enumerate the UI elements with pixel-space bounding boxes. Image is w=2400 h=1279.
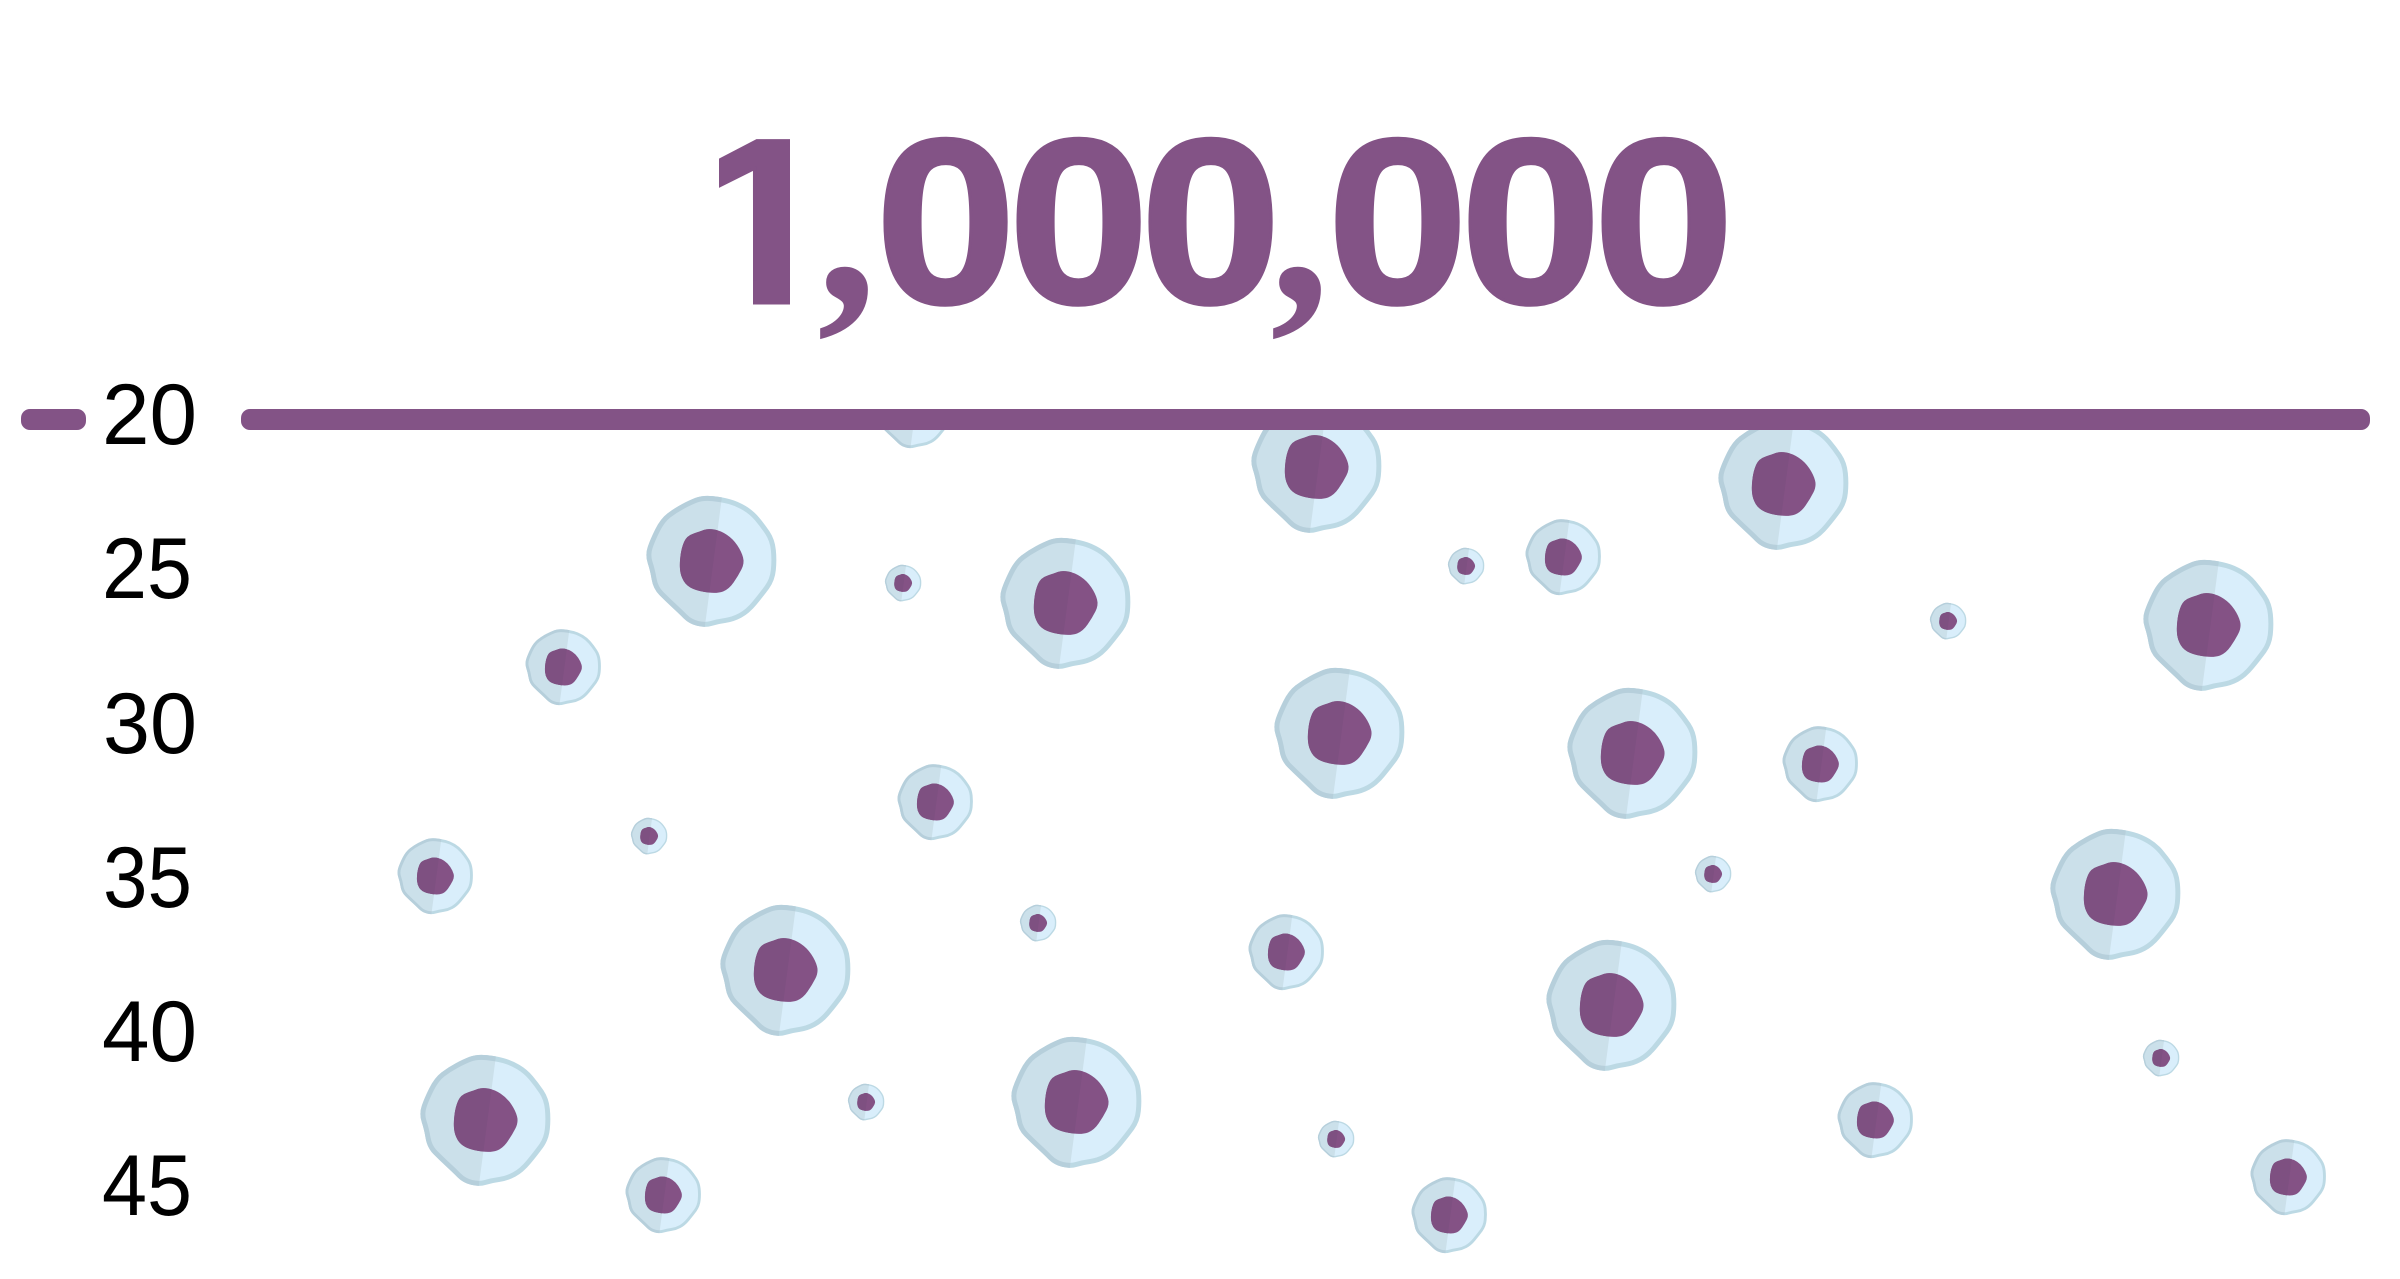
axis labels xyxy=(102,367,197,1234)
small cell 6 xyxy=(1021,905,1056,941)
medium cell 9 xyxy=(1413,1179,1485,1252)
medium cell 7 xyxy=(1839,1084,1911,1157)
medium cell 8 xyxy=(627,1159,699,1232)
small cell 3 xyxy=(1931,603,1966,639)
large cell 7 xyxy=(1570,690,1695,816)
label 25: 25 xyxy=(102,521,192,617)
second comma: , xyxy=(1270,88,1330,354)
medium cell 11, clipped by bar xyxy=(884,430,944,448)
large cell 3 xyxy=(649,498,774,624)
small cell 2 xyxy=(886,565,921,601)
label 35: 35 xyxy=(103,830,192,926)
small cell 1 xyxy=(1449,548,1484,584)
large cell 10 xyxy=(1549,942,1674,1068)
tick mark beside 20 xyxy=(21,409,86,430)
second zero group: 000 xyxy=(1327,89,1735,353)
large cell 6 xyxy=(1277,670,1402,796)
small cell 5 xyxy=(1696,856,1731,892)
medium cell 10 xyxy=(2252,1141,2324,1214)
first zero group: 000 xyxy=(875,89,1281,353)
medium cell 4 xyxy=(1784,728,1856,801)
label 45: 45 xyxy=(102,1138,192,1234)
small cell 9 xyxy=(1319,1121,1354,1157)
medium cell 3 xyxy=(899,766,971,839)
medium cell 1 xyxy=(1527,521,1599,594)
cell field xyxy=(399,374,2324,1252)
small cell 8 xyxy=(849,1084,884,1120)
medium cell 5 xyxy=(399,840,471,913)
digit 1: 1 xyxy=(686,89,850,353)
first comma: , xyxy=(817,88,877,354)
large cell 1 xyxy=(1251,430,1382,533)
label 40: 40 xyxy=(102,984,197,1080)
small cell 4 xyxy=(632,818,667,854)
title number xyxy=(719,136,1726,340)
small cell 7 xyxy=(2144,1040,2179,1076)
large cell 9 xyxy=(723,907,848,1033)
large cell 5 xyxy=(2146,562,2271,688)
large cell 8 xyxy=(2053,831,2178,957)
large cell 11 xyxy=(423,1057,548,1183)
large cell 2 xyxy=(1721,421,1846,547)
horizontal depth bar xyxy=(241,409,2370,430)
medium cell 2 xyxy=(527,631,599,704)
large cell 12 xyxy=(1014,1039,1139,1165)
label 20: 20 xyxy=(102,367,197,463)
large cell 4 xyxy=(1003,540,1128,666)
medium cell 6 xyxy=(1250,916,1322,989)
label 30: 30 xyxy=(103,676,197,772)
